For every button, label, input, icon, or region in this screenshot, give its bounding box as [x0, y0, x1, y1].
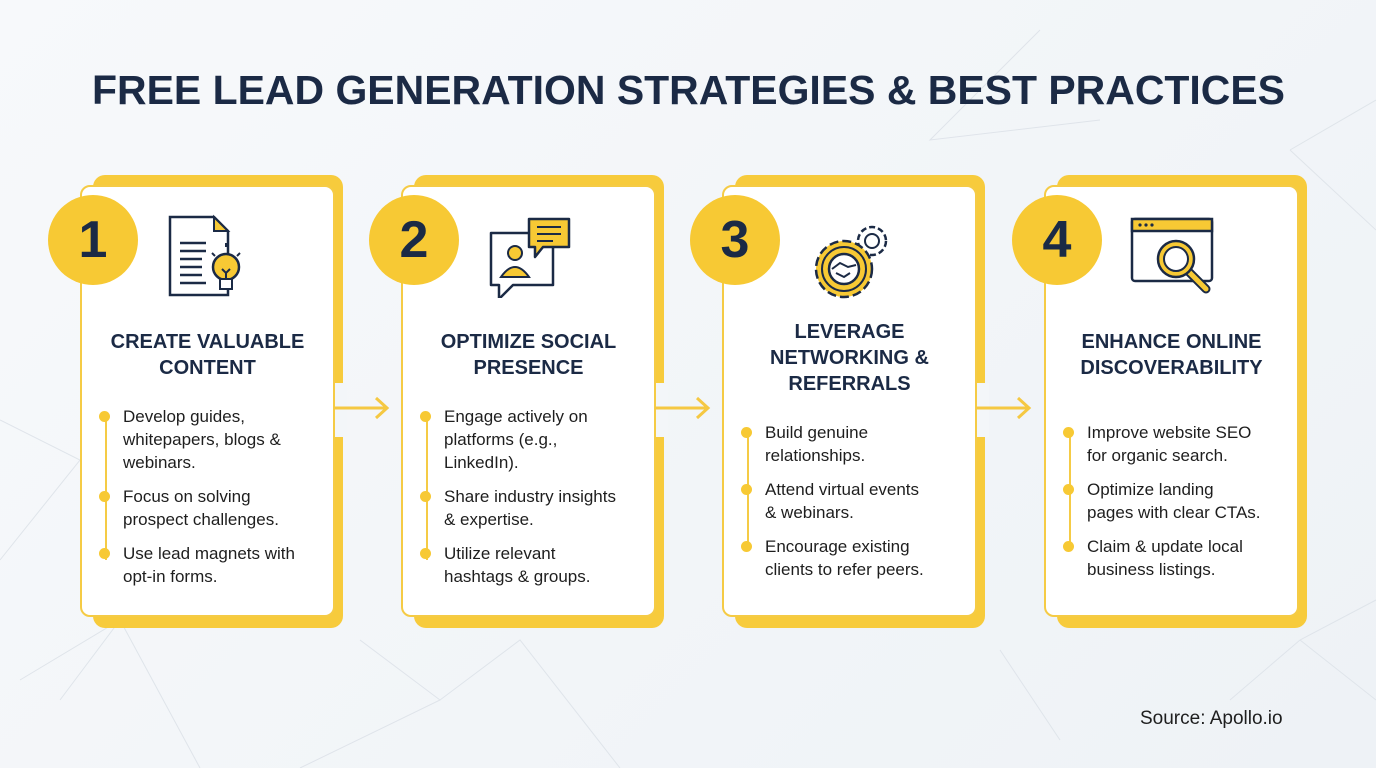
bullet list [741, 423, 924, 579]
number badge 3: 3 [721, 211, 749, 269]
bullet list: Build genuine [765, 423, 868, 442]
arrow 1 [335, 397, 390, 419]
bullet list [99, 407, 295, 586]
bullet list: LinkedIn). [444, 453, 519, 472]
icon: browser search [1130, 218, 1214, 294]
bullet list: & webinars. [765, 503, 854, 522]
heading: ENHANCE ONLINE [1081, 331, 1262, 353]
bullet list: Optimize landing [1087, 480, 1214, 499]
bullet list: platforms (e.g., [444, 430, 557, 449]
bullet list [1063, 423, 1261, 579]
bullet list: Engage actively on [444, 407, 588, 426]
heading [1080, 331, 1263, 379]
heading: DISCOVERABILITY [1080, 357, 1263, 379]
bullet list: opt-in forms. [123, 567, 217, 586]
heading [111, 331, 304, 379]
panel: optimize social presence [369, 175, 664, 628]
icon: gears handshake [814, 226, 888, 298]
bullet list: business listings. [1087, 560, 1216, 579]
panel: leverage networking & referrals [690, 175, 985, 628]
bullet list: webinars. [123, 453, 196, 472]
bullet list: Claim & update local [1087, 537, 1243, 556]
panel: create valuable content [48, 175, 343, 628]
bullet list: hashtags & groups. [444, 567, 590, 586]
number badge 1: 1 [79, 211, 107, 269]
bullet list: Use lead magnets with [123, 544, 295, 563]
arrow 2 [656, 397, 710, 419]
title: FREE LEAD GENERATION STRATEGIES & BEST PRACTICES [92, 67, 1285, 113]
heading: CREATE VALUABLE [111, 331, 304, 353]
bullet list: relationships. [765, 446, 865, 465]
bullet list: Encourage existing [765, 537, 910, 556]
heading [770, 321, 929, 395]
arrow 3 [977, 397, 1032, 419]
heading: PRESENCE [473, 357, 584, 379]
bullet list [420, 407, 616, 586]
bullet list: Attend virtual events [765, 480, 919, 499]
number badge 1 [48, 195, 138, 285]
panel: enhance online discoverability [1012, 175, 1307, 628]
bullet list: clients to refer peers. [765, 560, 924, 579]
bullet list: whitepapers, blogs & [123, 430, 281, 449]
number badge 4: 4 [1043, 211, 1071, 269]
bullet list: pages with clear CTAs. [1087, 503, 1261, 522]
number badge 2 [369, 195, 459, 285]
icon: document with lightbulb [168, 214, 241, 296]
bullet list: Improve website SEO [1087, 423, 1251, 442]
number badge 2: 2 [400, 211, 428, 269]
bullet list: Focus on solving [123, 487, 251, 506]
bullet list: Share industry insights [444, 487, 616, 506]
bullet list: prospect challenges. [123, 510, 279, 529]
number badge 4 [1012, 195, 1102, 285]
number badge 3 [690, 195, 780, 285]
bullet list: & expertise. [444, 510, 534, 529]
heading: REFERRALS [788, 373, 911, 395]
heading [441, 331, 616, 379]
source note: Source: Apollo.io [1140, 708, 1283, 729]
bullet list: for organic search. [1087, 446, 1228, 465]
bullet list: Utilize relevant [444, 544, 556, 563]
heading: OPTIMIZE SOCIAL [441, 331, 616, 353]
bullet list: Develop guides, [123, 407, 245, 426]
heading: LEVERAGE [794, 321, 905, 343]
heading: CONTENT [159, 357, 256, 379]
heading: NETWORKING & [770, 347, 929, 369]
icon: chat profile [490, 218, 570, 298]
